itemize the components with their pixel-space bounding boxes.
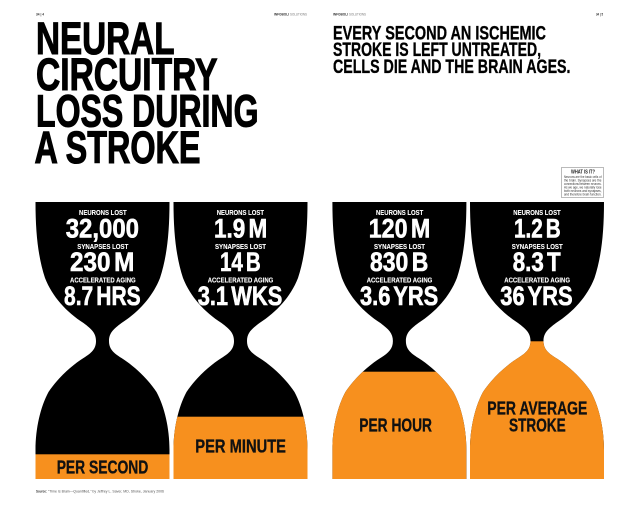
callout: what is it: WHAT IS IT?	[571, 170, 595, 176]
main title: CIRCUITRY	[36, 49, 218, 100]
source note: Source:	[36, 489, 47, 494]
page number right: 34 | 5	[596, 12, 603, 16]
panel: per average stroke hourglass	[467, 202, 607, 484]
main title: NEURAL	[36, 13, 174, 64]
panel: per average stroke hourglass: ACCELERATED AGING	[504, 276, 570, 285]
panel: per second hourglass: ACCELERATED AGING	[70, 276, 136, 285]
panel: per minute hourglass: 14 B	[220, 247, 261, 277]
panel: per minute hourglass: NEURONS LOST	[217, 208, 264, 217]
panel: per hour hourglass: PER HOUR	[359, 415, 432, 436]
running header left: SOLUTIONS	[290, 12, 307, 16]
panel: per average stroke hourglass: STROKE	[509, 415, 566, 436]
main title: A STROKE	[34, 122, 200, 173]
subheading	[333, 22, 570, 78]
page number left: 34 | 4	[36, 12, 45, 16]
panel: per minute hourglass: ACCELERATED AGING	[208, 276, 273, 285]
panel: per second hourglass: 230 M	[70, 247, 134, 277]
panel: per minute hourglass: 1.9 M	[214, 213, 267, 243]
source note: "Time Is Brain—Quantified," by Jeffrey L. Saver, MD, Stroke, January 2006	[48, 489, 164, 494]
panel: per second hourglass: PER SECOND	[57, 456, 148, 477]
callout: what is it: the brain. Synapses are the	[564, 178, 602, 182]
main title	[34, 13, 258, 173]
panel: per minute hourglass: SYNAPSES LOST	[215, 242, 266, 251]
panel: per average stroke hourglass: PER AVERAGE	[487, 398, 587, 419]
panel: per hour hourglass: 3.6 YRS	[360, 281, 438, 311]
running header right	[333, 12, 366, 16]
panel: per hour hourglass	[329, 202, 469, 485]
callout: what is it: As we age, we naturally lose	[564, 186, 602, 190]
running header left	[274, 12, 307, 16]
subheading: STROKE IS LEFT UNTREATED,	[333, 39, 541, 61]
running header left: INFOBOLI	[274, 12, 289, 16]
callout: what is it	[562, 168, 604, 198]
main title: LOSS DURING	[36, 86, 258, 136]
panel: per second hourglass: 8.7 HRS	[64, 281, 141, 311]
panel: per hour hourglass: 830 B	[370, 247, 428, 277]
running header right: SOLUTIONS	[349, 12, 366, 16]
panel: per hour hourglass: 120 M	[369, 213, 430, 243]
running header right: INFOBOLI	[333, 12, 348, 16]
panel: per minute hourglass	[170, 202, 310, 485]
panel: per second hourglass: NEURONS LOST	[79, 208, 127, 217]
callout: what is it: and therefore brain function.	[564, 192, 602, 196]
panel: per hour hourglass: SYNAPSES LOST	[374, 242, 425, 251]
panel: per minute hourglass: PER MINUTE	[195, 436, 286, 457]
callout: what is it: both neurons and synapses,	[564, 189, 602, 193]
panel: per average stroke hourglass: NEURONS LOST	[513, 208, 561, 217]
panel: per average stroke hourglass: 8.3 T	[513, 247, 561, 277]
panel: per second hourglass: SYNAPSES LOST	[77, 242, 129, 251]
panel: per average stroke hourglass: SYNAPSES LOST	[512, 242, 563, 251]
callout: what is it: connections between neurons.	[564, 182, 602, 186]
subheading: EVERY SECOND AN ISCHEMIC	[333, 22, 546, 44]
callout: what is it: Neurons are the basic cells of	[564, 175, 602, 179]
panel: per hour hourglass: NEURONS LOST	[376, 208, 424, 217]
panel: per minute hourglass: 3.1 WKS	[198, 281, 282, 311]
panel: per average stroke hourglass: 36 YRS	[500, 281, 573, 311]
panel: per second hourglass: 32,000	[66, 213, 139, 243]
panel: per hour hourglass: ACCELERATED AGING	[367, 276, 432, 285]
panel: per second hourglass	[32, 202, 172, 484]
panel: per average stroke hourglass: 1.2 B	[514, 213, 561, 243]
